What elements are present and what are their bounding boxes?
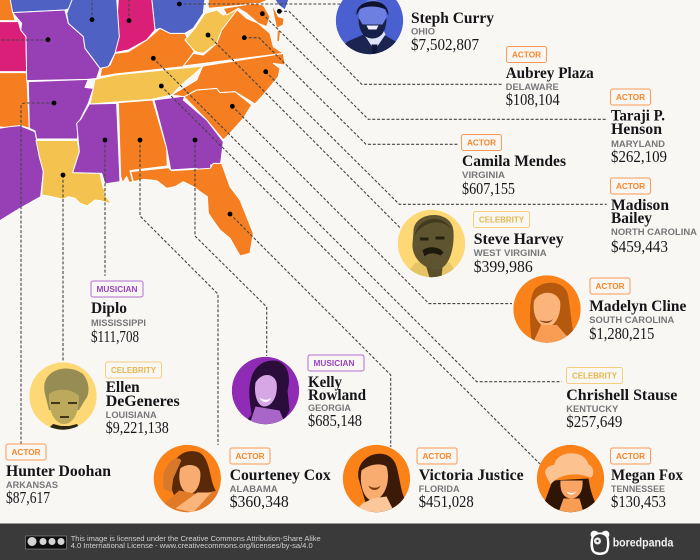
person: Madison Bailey: NORTH CAROLINA [611,227,698,237]
footer bar [0,524,700,560]
person: Madison Bailey: ACTOR [616,181,646,191]
person: Victoria Justice: ACTOR [422,451,452,461]
person: Madison Bailey: Madison [611,197,669,214]
license text: This image is licensed under the Creative Commons Attribution-Share Alike [71,534,321,543]
state location dots [46,2,282,216]
person: Madison Bailey: Bailey [611,210,652,227]
person: Madison Bailey: $459,443 [611,237,668,256]
icon: boredpanda logo [590,531,609,555]
person: Hunter Doohan [6,444,111,507]
icon: Creative Commons badge [26,536,66,549]
person: Diplo: MUSICIAN [96,284,138,294]
person: Taraji P. Henson: ACTOR [616,92,646,102]
person: Steph Curry: OHIO [411,26,435,36]
person: Victoria Justice: $451,028 [419,492,474,511]
person: Aubrey Plaza [506,46,594,109]
person: Courteney Cox: $360,348 [230,492,289,511]
person: Aubrey Plaza: DELAWARE [506,82,559,92]
person: Megan Fox: ACTOR [616,451,646,461]
person: Aubrey Plaza: $108,104 [506,90,560,109]
leader lines [0,0,607,464]
person: Camila Mendes: VIRGINIA [462,170,506,180]
portrait: Madelyn Cline [513,275,581,343]
person: Ellen DeGeneres: DeGeneres [106,393,180,410]
person: Aubrey Plaza: ACTOR [512,50,542,60]
person: Steve Harvey: Steve Harvey [474,231,564,248]
person: Camila Mendes: Camila Mendes [462,153,566,170]
person: Kelly Rowland [308,355,366,430]
person: Diplo [91,281,146,346]
person: Steph Curry: Steph Curry [411,10,494,27]
person: Courteney Cox [230,448,331,511]
person: Diplo: $111,708 [91,327,139,346]
person: Steph Curry: $7,502,807 [411,35,479,54]
person: Steve Harvey [474,212,564,276]
license text: 4.0 International License - www.creativecommons.org/licenses/by-sa/4.0 [71,541,313,550]
person: Hunter Doohan: ACTOR [12,447,41,457]
person: Victoria Justice: Victoria Justice [419,467,524,484]
person: Hunter Doohan: Hunter Doohan [6,463,111,480]
person: Megan Fox [610,448,683,511]
person: Madelyn Cline: SOUTH CAROLINA [589,315,675,325]
person: Victoria Justice [417,448,524,511]
person: Chrishell Stause: $257,649 [566,412,622,431]
person: Megan Fox: $130,453 [611,492,666,511]
person: Megan Fox: Megan Fox [611,467,683,484]
person: Chrishell Stause: Chrishell Stause [566,387,677,404]
person: Kelly Rowland: Kelly [308,374,342,391]
person: Ellen DeGeneres: Ellen [106,379,140,396]
person: Steve Harvey: CELEBRITY [479,214,524,224]
person: Madelyn Cline: Madelyn Cline [589,298,686,315]
portrait: Megan Fox [537,445,604,512]
person: Taraji P. Henson: $262,109 [611,147,667,166]
person: Madelyn Cline: ACTOR [596,281,625,291]
person: Steph Curry [411,10,494,54]
person: Victoria Justice: FLORIDA [419,484,460,494]
person: Courteney Cox: ACTOR [236,451,265,461]
portrait: Courteney Cox [154,445,221,512]
portrait: Steve Harvey [398,210,465,278]
person: Kelly Rowland: $685,148 [308,411,362,430]
portrait: Victoria Justice [343,445,410,512]
person: Kelly Rowland: GEORGIA [308,403,352,413]
person: Diplo: Diplo [91,300,127,317]
person: Chrishell Stause: CELEBRITY [572,370,617,380]
person: Steve Harvey: WEST VIRGINIA [474,248,547,258]
person: Chrishell Stause [566,368,677,431]
person: Camila Mendes [462,134,566,198]
portrait: Steph Curry [336,0,404,55]
person: Megan Fox: TENNESSEE [611,484,665,494]
person: Ellen DeGeneres [106,362,180,437]
person: Diplo: MISSISSIPPI [91,318,146,328]
person: Taraji P. Henson [610,89,667,166]
person: Steve Harvey: $399,986 [474,257,533,276]
person: Ellen DeGeneres: LOUISIANA [106,410,157,420]
person: Madison Bailey [610,178,698,256]
person: Kelly Rowland: Rowland [308,387,366,404]
person: Courteney Cox: ALABAMA [230,484,278,494]
person: Hunter Doohan: $87,617 [6,488,50,507]
logo wordmark: boredpanda [613,538,674,550]
person: Taraji P. Henson: MARYLAND [611,139,665,149]
license text [71,534,321,550]
person: Madelyn Cline: $1,280,215 [589,324,654,343]
person: Kelly Rowland: MUSICIAN [314,358,354,368]
person: Chrishell Stause: KENTUCKY [566,404,618,414]
person: Ellen DeGeneres: CELEBRITY [111,365,156,375]
person: Camila Mendes: ACTOR [467,138,497,148]
person: Aubrey Plaza: Aubrey Plaza [506,65,594,82]
portrait: Ellen DeGeneres [29,362,97,430]
portrait: Kelly Rowland [232,357,299,424]
person: Courteney Cox: Courteney Cox [230,467,331,484]
person: Hunter Doohan: ARKANSAS [6,480,58,490]
map: southeastern US states [0,0,289,256]
person: Taraji P. Henson: Henson [611,121,662,138]
person: Madelyn Cline [589,278,686,343]
person: Ellen DeGeneres: $9,221,138 [106,418,169,437]
person: Taraji P. Henson: Taraji P. [611,108,665,125]
person: Camila Mendes: $607,155 [462,179,515,198]
